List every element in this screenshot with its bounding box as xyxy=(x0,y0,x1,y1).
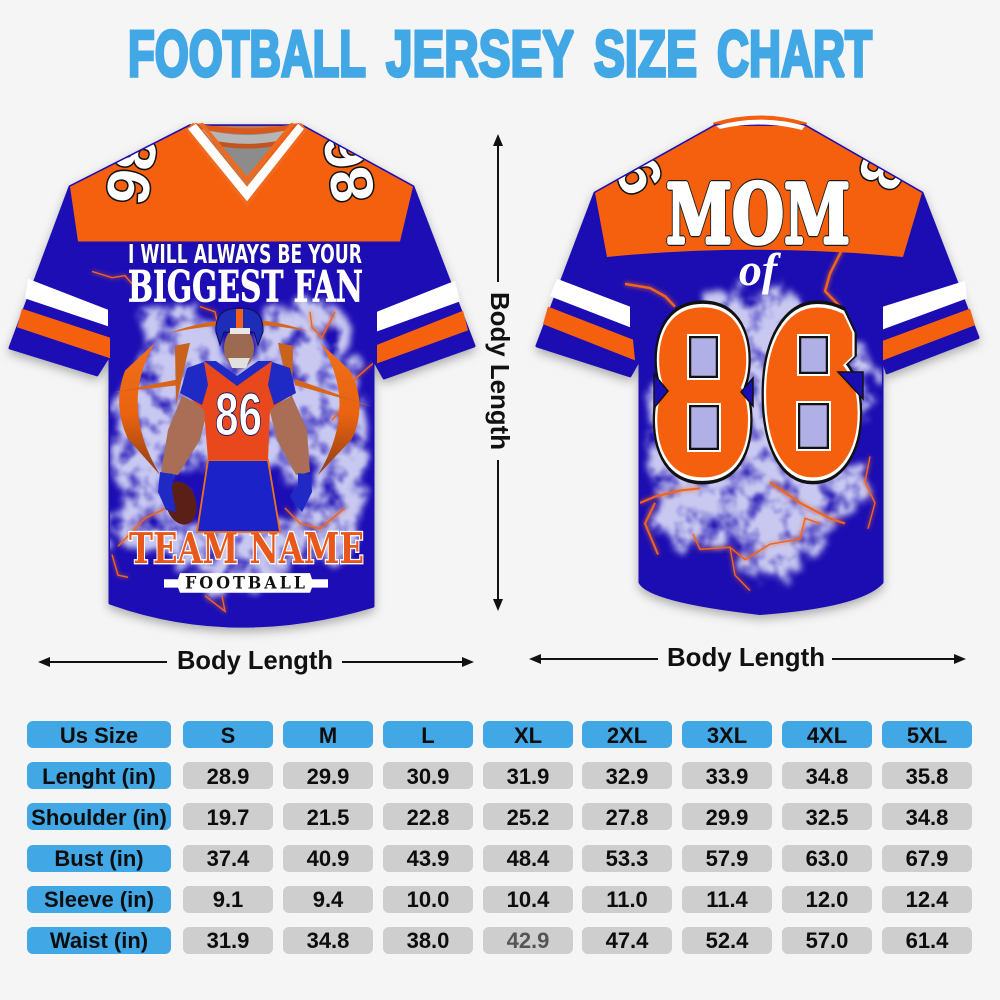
yoke xyxy=(70,126,413,242)
bust row: 57.9 xyxy=(706,846,748,871)
back jersey body xyxy=(537,126,978,613)
left sleeve stripes xyxy=(17,279,110,358)
header row: 3XL xyxy=(707,723,747,748)
sleeve row: 11.4 xyxy=(706,887,749,912)
shoulder row: Shoulder (in) xyxy=(31,805,167,830)
length row: 28.9 xyxy=(207,764,249,789)
player arms xyxy=(161,396,208,475)
header row: Us Size xyxy=(60,723,138,748)
front jersey garment xyxy=(10,123,474,626)
player xyxy=(158,308,312,532)
bust row xyxy=(27,845,972,872)
title xyxy=(128,17,872,90)
shoulder row: 27.8 xyxy=(606,805,648,830)
length row: 31.9 xyxy=(507,764,549,789)
window borders xyxy=(688,335,830,451)
sleeve row xyxy=(27,886,972,913)
back collar band xyxy=(716,120,805,130)
title: FOOTBALL xyxy=(128,17,366,90)
waist row: 34.8 xyxy=(307,928,349,953)
sleeve row: Sleeve (in) xyxy=(44,887,154,912)
waist row: 31.9 xyxy=(207,928,249,953)
gloves xyxy=(158,472,176,512)
shoulder row: 34.8 xyxy=(906,805,948,830)
title: CHART xyxy=(717,17,872,90)
bust row: 53.3 xyxy=(606,846,648,871)
shoulder row: 32.5 xyxy=(806,805,848,830)
waist row: 52.4 xyxy=(706,928,749,953)
front width arrow xyxy=(38,645,474,675)
bust row: 67.9 xyxy=(906,846,948,871)
shoulder row xyxy=(27,803,972,830)
length row: 33.9 xyxy=(706,764,748,789)
bust row: 37.4 xyxy=(207,846,250,871)
player number: 86 xyxy=(215,381,262,448)
football graphic xyxy=(113,319,372,475)
vertical body length arrow: Body Length xyxy=(485,292,515,450)
title: SIZE xyxy=(594,17,697,90)
sleeve row: 10.0 xyxy=(407,887,449,912)
front jersey xyxy=(10,123,474,626)
header row xyxy=(27,721,972,748)
bust row: Bust (in) xyxy=(54,846,144,871)
front clouds and lightning xyxy=(92,271,373,611)
length row: Lenght (in) xyxy=(42,764,156,789)
length row: 35.8 xyxy=(906,764,948,789)
sleeve row: 9.1 xyxy=(213,887,243,912)
back shoulder numbers: 86 xyxy=(589,114,676,204)
back shoulder numbers: 86 xyxy=(845,109,932,199)
sleeve row: 9.4 xyxy=(313,887,344,912)
length row xyxy=(27,762,972,789)
shoulder row: 25.2 xyxy=(507,805,549,830)
waist row: 42.9 xyxy=(507,928,549,953)
sleeve row: 12.0 xyxy=(806,887,848,912)
mom name: MOM xyxy=(666,167,850,263)
length row: 32.9 xyxy=(606,764,648,789)
back right sleeve stripes xyxy=(883,281,975,360)
big number 86: 86 xyxy=(664,296,851,496)
back clouds and lightning xyxy=(625,250,875,591)
of: of xyxy=(739,244,782,295)
length row: 34.8 xyxy=(806,764,848,789)
length row: 30.9 xyxy=(407,764,449,789)
length row: 29.9 xyxy=(307,764,349,789)
back jersey garment xyxy=(537,109,978,613)
header row: 2XL xyxy=(607,723,647,748)
big number 86: 86 xyxy=(664,296,851,496)
shoulder row: 22.8 xyxy=(407,805,449,830)
size chart table xyxy=(27,721,972,954)
title: JERSEY xyxy=(386,17,574,90)
front width arrow: Body Length xyxy=(177,645,333,675)
bust row: 63.0 xyxy=(806,846,848,871)
biggest fan: BIGGEST FAN xyxy=(128,262,363,313)
bust row: 48.4 xyxy=(507,846,550,871)
back yoke xyxy=(595,126,922,257)
sleeve row: 12.4 xyxy=(906,887,949,912)
football xyxy=(161,478,201,528)
slogan: I WILL ALWAYS BE YOUR xyxy=(128,239,362,269)
player helmet xyxy=(216,308,263,345)
bust row: 43.9 xyxy=(407,846,449,871)
sleeve row: 10.4 xyxy=(507,887,550,912)
header row: 5XL xyxy=(907,723,947,748)
back collar xyxy=(713,115,807,131)
right sleeve stripes xyxy=(377,281,468,363)
header row: XL xyxy=(514,723,542,748)
shoulder numbers: 86 xyxy=(310,128,388,208)
big number 86: 86 xyxy=(664,296,851,496)
header row: 4XL xyxy=(807,723,847,748)
number notches xyxy=(654,372,863,408)
football banner: FOOTBALL xyxy=(185,573,306,593)
header row: L xyxy=(421,723,435,748)
vertical body length arrow xyxy=(485,134,515,611)
number windows xyxy=(690,337,828,449)
shoulder row: 29.9 xyxy=(706,805,748,830)
bust row: 40.9 xyxy=(307,846,349,871)
waist row: 57.0 xyxy=(806,928,848,953)
back shoulder numbers xyxy=(617,158,902,195)
collar xyxy=(185,123,307,207)
shoulder row: 21.5 xyxy=(307,805,349,830)
waist row: 61.4 xyxy=(906,928,949,953)
waist row: 47.4 xyxy=(606,928,649,953)
waist row xyxy=(27,927,972,954)
header row: S xyxy=(221,723,235,748)
waist row: Waist (in) xyxy=(50,928,148,953)
shoulder numbers: 86 xyxy=(93,130,170,210)
back jersey xyxy=(537,109,978,613)
back width arrow xyxy=(529,642,966,672)
back width arrow: Body Length xyxy=(667,642,825,672)
mom name: MOM xyxy=(666,167,850,263)
shoulder numbers xyxy=(106,140,375,204)
back left sleeve stripes xyxy=(543,279,635,360)
player face xyxy=(224,327,254,369)
player pants xyxy=(197,460,280,532)
waist row: 38.0 xyxy=(407,928,449,953)
team name: TEAM NAME xyxy=(129,523,364,573)
front jersey body xyxy=(10,126,474,626)
shoulder row: 19.7 xyxy=(207,805,249,830)
player jersey xyxy=(186,361,290,460)
sleeve row: 11.0 xyxy=(606,887,648,912)
header row: M xyxy=(319,723,337,748)
